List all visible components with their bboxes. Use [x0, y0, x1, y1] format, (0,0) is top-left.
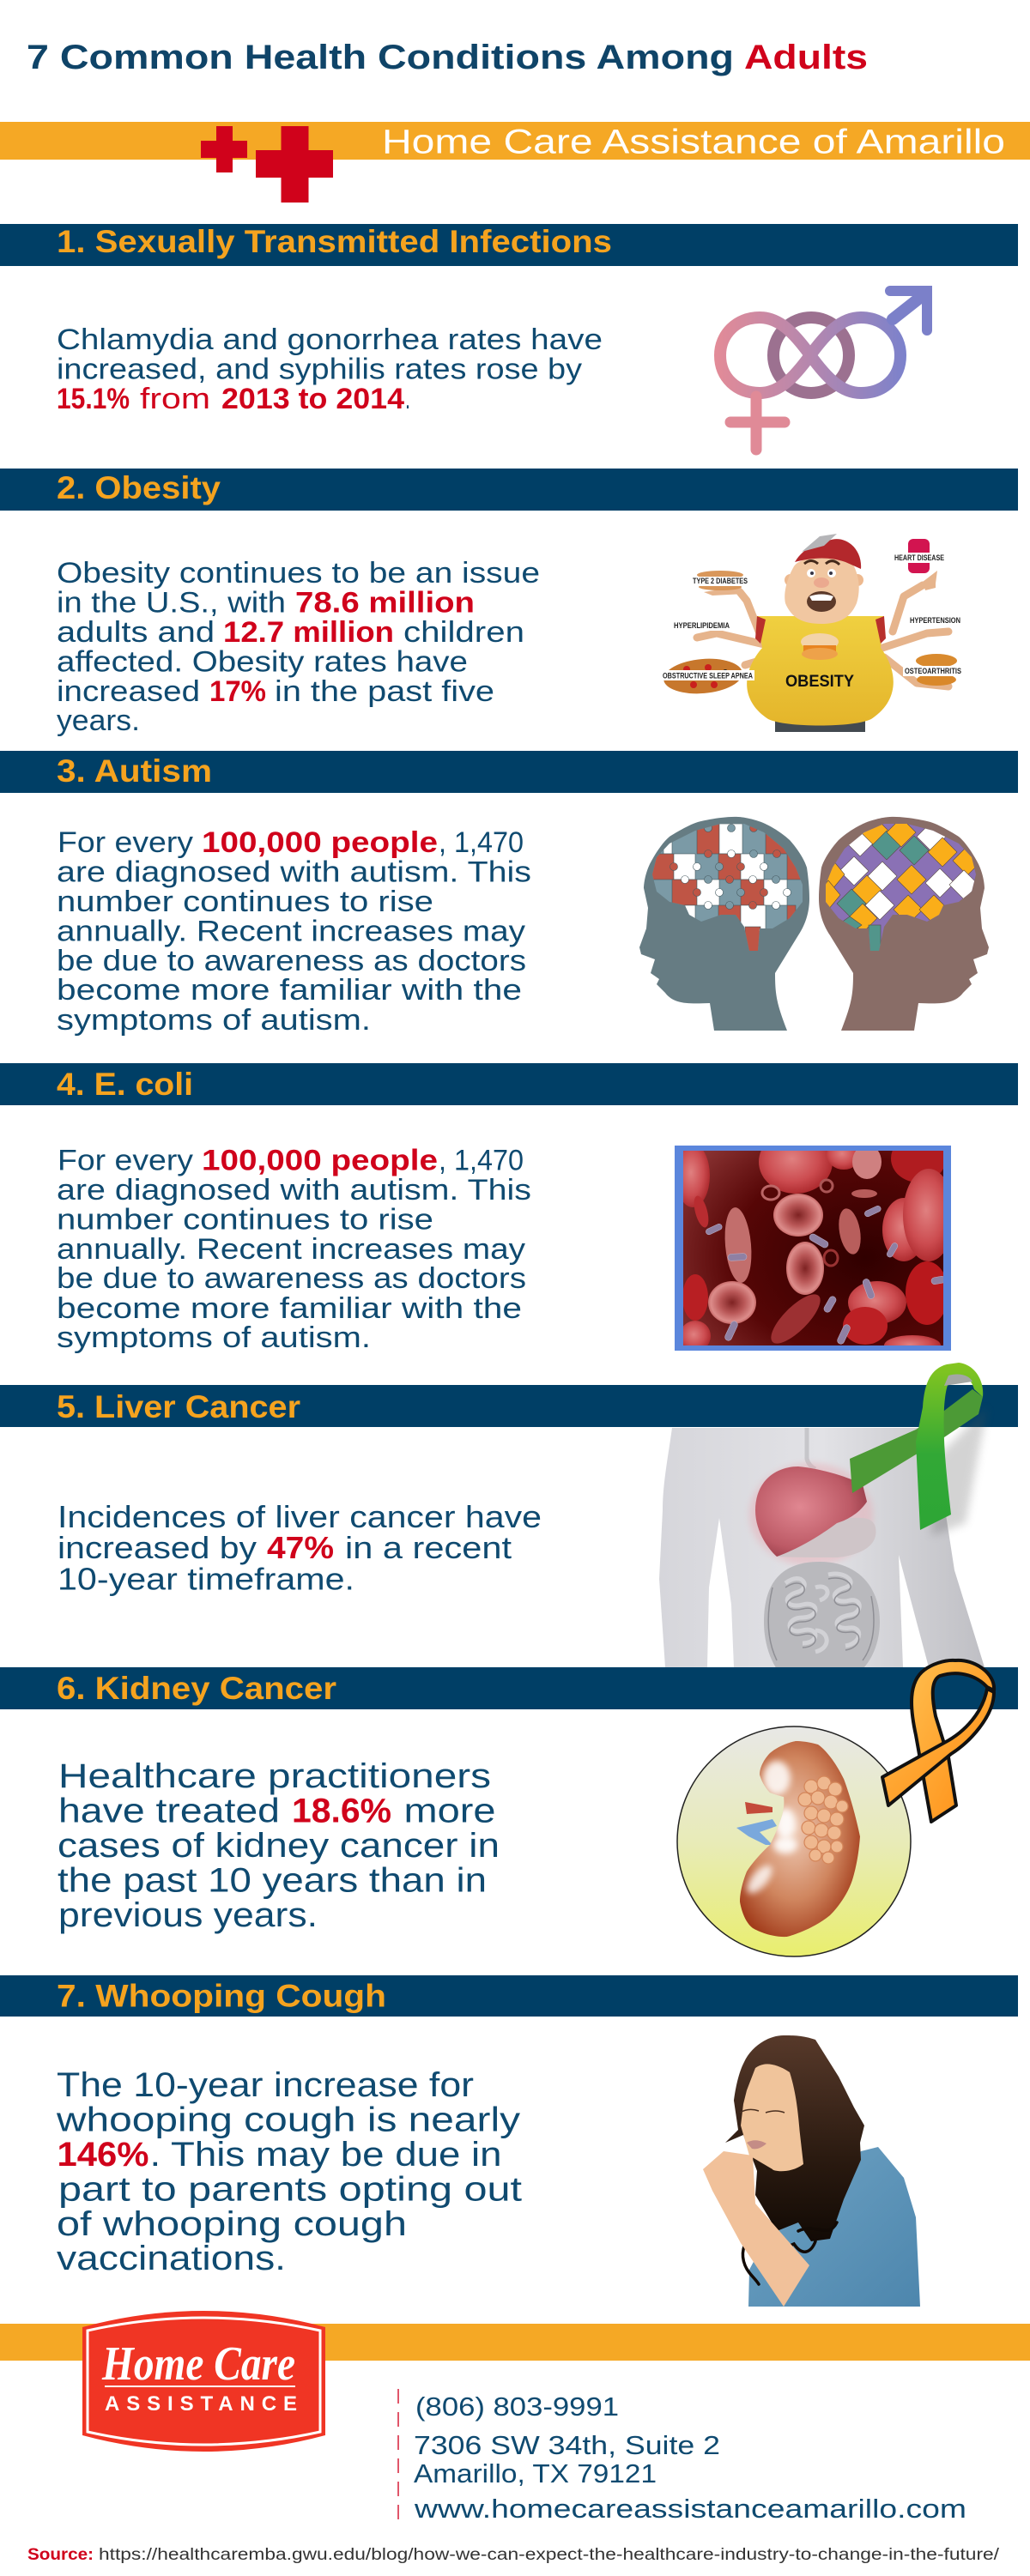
text block 1 [57, 324, 603, 415]
text block 6: previous years. [58, 1896, 318, 1934]
text block 1: 2013 to 2014 [221, 383, 404, 415]
illustration: woman coughing [703, 2035, 920, 2307]
source line: Source: [27, 2546, 94, 2564]
text block 3: annually. Recent increases may [57, 915, 526, 947]
text block 1: Chlamydia and gonorrhea rates have [57, 324, 603, 356]
text block 4: be due to awareness as doctors [57, 1262, 526, 1295]
text block 3: 100,000 people [202, 826, 438, 859]
logo: home care assistance: Home Care [101, 2337, 295, 2391]
text block 7: . This may be due in [149, 2136, 501, 2174]
text block 7: part to parents opting out [58, 2171, 522, 2209]
heading bar 1: 1. Sexually Transmitted Infections [57, 224, 612, 259]
tumour cluster [798, 1776, 848, 1864]
panel: 2 obesity [0, 469, 1018, 737]
text block 4: number continues to rise [57, 1203, 433, 1236]
text block 3: are diagnosed with autism. This [57, 856, 531, 889]
text block 4: annually. Recent increases may [57, 1233, 526, 1266]
text block 6: the past 10 years than in [58, 1862, 487, 1900]
heading bar 3 [0, 751, 1018, 793]
shirt burger [801, 633, 839, 660]
text block 3: , 1,470 [439, 826, 524, 859]
banner: home care assistance of amarillo: Home Care Assistance of Amarillo [382, 124, 1005, 161]
condition labels: TYPE 2 DIABETES [693, 577, 748, 585]
text block 2: 78.6 million [295, 587, 475, 620]
contact details: 7306 SW 34th, Suite 2 [414, 2430, 720, 2460]
text block 5: increased by [58, 1530, 258, 1565]
text block 2: adults and [57, 616, 215, 649]
food: hot dog [697, 571, 743, 590]
text block 1: from [140, 383, 210, 415]
contact details: Amarillo, TX 79121 [414, 2458, 657, 2488]
text block 2: 17% [209, 675, 266, 708]
heading bar 4: 4. E. coli [57, 1067, 193, 1102]
heading bar 7: 7. Whooping Cough [57, 1979, 386, 2013]
text block 5 [58, 1499, 542, 1596]
text block 4 [57, 1145, 531, 1354]
title: Adults [744, 39, 868, 76]
heading bar 7 [0, 1975, 1018, 2017]
text block 4: symptoms of autism. [57, 1321, 371, 1354]
text block 4: For every [58, 1145, 194, 1177]
heading bar 5 [0, 1385, 1018, 1427]
heading bar 5: 5. Liver Cancer [57, 1389, 300, 1424]
food: burger [916, 654, 957, 686]
text block 3: number continues to rise [57, 886, 433, 918]
text block 4: are diagnosed with autism. This [57, 1174, 531, 1206]
text block 5: Incidences of liver cancer have [58, 1499, 542, 1534]
illustration: obesity cartoon [662, 534, 963, 732]
heading bar 2 [0, 469, 1018, 511]
heading bar 2: 2. Obesity [57, 470, 221, 505]
panel: 5 liver cancer [0, 1363, 1018, 1669]
text block 6: have treated [58, 1792, 280, 1829]
contact details: www.homecareassistanceamarillo.com [414, 2494, 966, 2524]
condition labels: OBSTRUCTIVE SLEEP APNEA [663, 671, 753, 680]
panel: 4 e. coli [0, 1063, 1018, 1356]
icon: orange awareness ribbon [882, 1660, 994, 1822]
text block 2: affected. Obesity rates have [57, 645, 468, 678]
text block 7: whooping cough is nearly [56, 2101, 520, 2138]
text block 4: become more familiar with the [57, 1292, 522, 1325]
logo: home care assistance: ASSISTANCE [105, 2392, 297, 2416]
text block 3: For every [58, 826, 194, 859]
condition labels: HYPERLIPIDEMIA [674, 621, 730, 630]
text block 3: symptoms of autism. [57, 1004, 371, 1037]
text block 2: in the U.S., with [57, 587, 286, 620]
text block 2: increased [57, 675, 200, 708]
text block 6: cases of kidney cancer in [58, 1827, 500, 1865]
text block 2: in the past five [275, 675, 494, 708]
illustration: right head with puzzle brain [816, 817, 989, 1031]
text block 6: 18.6% [292, 1792, 391, 1829]
text block 7: vaccinations. [57, 2240, 286, 2277]
text block 1: . [405, 383, 410, 415]
illustration: kidney with tumour [677, 1726, 911, 1956]
text block 2: Obesity continues to be an issue [57, 557, 540, 590]
heading bar 1 [0, 224, 1018, 266]
source line: https://healthcaremba.gwu.edu/blog/how-we-can-expect-the-healthcare-industry-to-change-in-the-future/ [99, 2546, 1000, 2564]
text block 7: of whooping cough [57, 2205, 407, 2243]
footer band [0, 2324, 1030, 2361]
condition labels: OSTEOARTHRITIS [905, 667, 961, 675]
text block 6: Healthcare practitioners [58, 1757, 491, 1795]
text block 4: 100,000 people [202, 1145, 438, 1177]
text block 1: 15.1% [57, 383, 130, 415]
illustration: obesity cartoon: OBESITY [785, 673, 854, 691]
logo: home care assistance [82, 2311, 325, 2452]
icon: green awareness ribbon [850, 1363, 987, 1536]
text block 5: in a recent [345, 1530, 512, 1565]
text block 4: , 1,470 [439, 1145, 524, 1177]
panel: 1 sexually transmitted infections [0, 224, 1018, 450]
panel: 6 kidney cancer [0, 1660, 1018, 1956]
panel: 7 whooping cough [0, 1975, 1018, 2307]
food: pizza [662, 656, 744, 697]
text block 6 [58, 1757, 500, 1934]
text block 6: more [403, 1792, 496, 1829]
heading bar 6 [0, 1667, 1018, 1709]
illustration: left head with puzzle brain [639, 817, 809, 1031]
condition labels: HEART DISEASE [894, 553, 944, 562]
text block 3 [57, 826, 531, 1037]
icon: gender symbols [720, 291, 927, 450]
text block 5: 10-year timeframe. [58, 1562, 354, 1596]
text block 3: be due to awareness as doctors [57, 945, 526, 977]
heading bar 4 [0, 1063, 1018, 1105]
illustration: torso and liver [659, 1428, 985, 1669]
dashed divider [397, 2389, 399, 2525]
contact details: (806) 803-9991 [415, 2392, 619, 2422]
title: 7 Common Health Conditions Among [27, 39, 734, 76]
contact details [414, 2392, 966, 2524]
text block 5: 47% [267, 1530, 334, 1565]
banner: home care assistance of amarillo [0, 122, 1030, 161]
heading bar 6: 6. Kidney Cancer [57, 1671, 336, 1706]
text block 7 [56, 2066, 522, 2277]
text block 7: The 10-year increase for [57, 2066, 474, 2104]
text block 2: children [403, 616, 524, 649]
text block 3: become more familiar with the [57, 974, 522, 1007]
icon: red crosses [201, 126, 333, 203]
text block 2: 12.7 million [223, 616, 394, 649]
text block 7: 146% [57, 2136, 149, 2174]
food: popsicle [908, 539, 930, 573]
text block 1: increased, and syphilis rates rose by [57, 354, 583, 386]
heading bar 3: 3. Autism [57, 753, 212, 789]
text block 2: years. [57, 704, 140, 737]
text block 2 [57, 557, 540, 737]
condition labels [662, 553, 963, 680]
condition labels: HYPERTENSION [910, 616, 960, 625]
illustration: e. coli and blood cells [675, 1146, 951, 1351]
panel: 3 autism [0, 751, 1018, 1037]
